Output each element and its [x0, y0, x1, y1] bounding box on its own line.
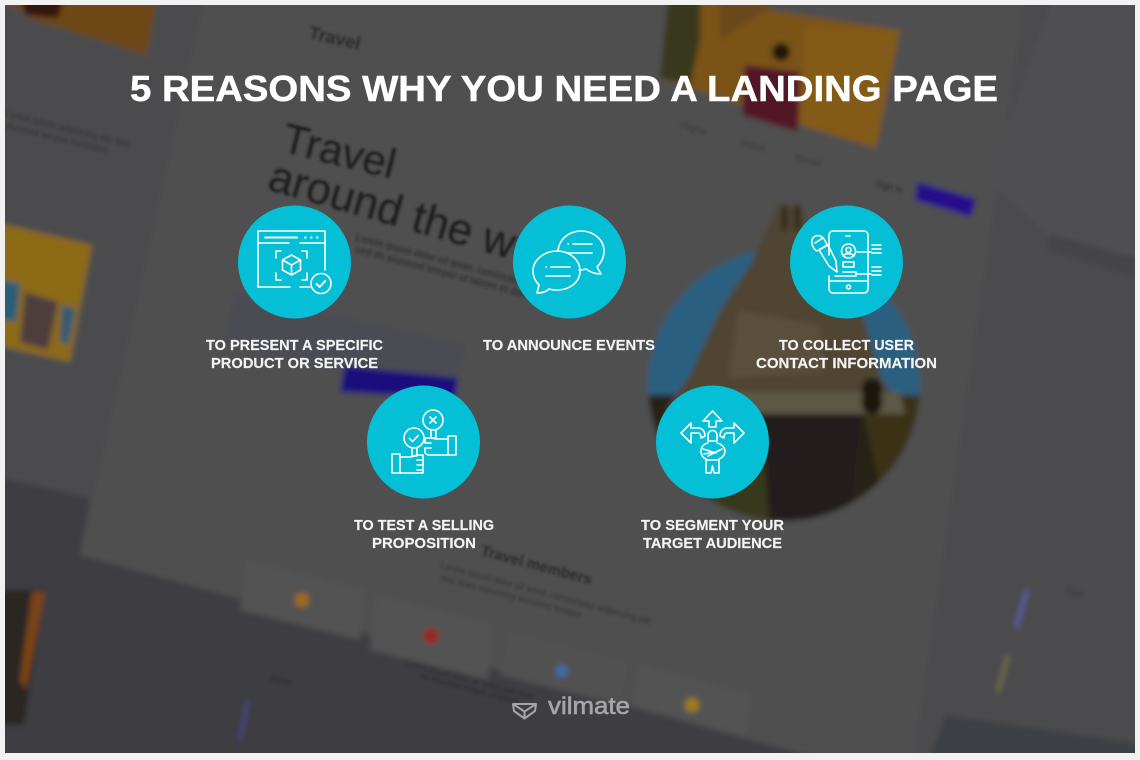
- blurred landing page screenshot background: Travel: [307, 22, 362, 54]
- label: TO COLLECT USER: [779, 338, 915, 354]
- icon: product window with cube: [238, 206, 351, 318]
- blurred landing page screenshot background: Rome: [269, 673, 293, 688]
- blurred landing page screenshot background: Flights: [679, 120, 708, 137]
- blurred landing page screenshot background: Lorem ipsum dolor sit amet, consectetur adipiscing elit: [354, 232, 590, 305]
- label: TO SEGMENT YOUR: [641, 518, 785, 534]
- label: second line, reason 5: TARGET AUDIENCE: [643, 536, 782, 552]
- blurred landing page screenshot background: Lorem ipsum adipiscing elit, sed: [5, 108, 131, 149]
- icon: vilmate envelope mark: [513, 704, 536, 718]
- reason 1: present a product or service: [206, 206, 384, 354]
- blurred landing page screenshot background: Sign in: [874, 178, 904, 195]
- icon: hands holding check and cross signs: [367, 386, 480, 498]
- reason 2: announce events: [483, 206, 655, 354]
- blurred landing page screenshot background: Lorem ipsum dolor sit amet, sed diam: [404, 658, 536, 702]
- icon: chat bubbles: [513, 206, 626, 318]
- blurred landing page screenshot background: Travel: [278, 114, 401, 188]
- label: second line, reason 3: CONTACT INFORMATION: [756, 356, 937, 372]
- label: TO PRESENT A SPECIFIC: [206, 338, 384, 354]
- blurred landing page screenshot background: sed do eiusmod tempor ut labore et dolore magna: [354, 244, 571, 312]
- logo: vilmate: [513, 693, 630, 720]
- label: second line, reason 1: PRODUCT OR SERVICE: [211, 356, 378, 372]
- icon: person with three direction arrows: [656, 386, 769, 498]
- blurred landing page screenshot background: sed diam nonummy eiusmod tempor: [439, 572, 583, 620]
- blurred landing page screenshot background: do eiusmod tempor ut labore: [419, 671, 521, 706]
- wordmark: vilmate: [548, 693, 630, 720]
- blurred landing page screenshot background: Travel members: [479, 542, 594, 588]
- reason 4: test a selling proposition: [354, 386, 494, 534]
- blurred landing page screenshot background: Rental: [794, 152, 822, 169]
- blurred landing page screenshot background: eiusmod tempor incididunt: [5, 120, 109, 155]
- reason 3: collect contact information: [779, 206, 915, 354]
- icon: phone form and pencil: [790, 206, 903, 318]
- blurred landing page screenshot background: around the wo: [263, 152, 545, 275]
- title: 5 REASONS WHY YOU NEED A LANDING PAGE: [130, 68, 998, 109]
- blurred landing page screenshot background: Lorem ipsum dolor sit amet, consectetur adipiscing elit: [439, 560, 652, 626]
- label: TO ANNOUNCE EVENTS: [483, 338, 655, 354]
- label: TO TEST A SELLING: [354, 518, 494, 534]
- blurred landing page screenshot background: Hotels: [739, 137, 767, 154]
- blurred landing page screenshot background: Paris: [1064, 586, 1084, 600]
- label: second line, reason 4: PROPOSITION: [372, 536, 476, 552]
- reason 5: segment target audience: [641, 386, 785, 534]
